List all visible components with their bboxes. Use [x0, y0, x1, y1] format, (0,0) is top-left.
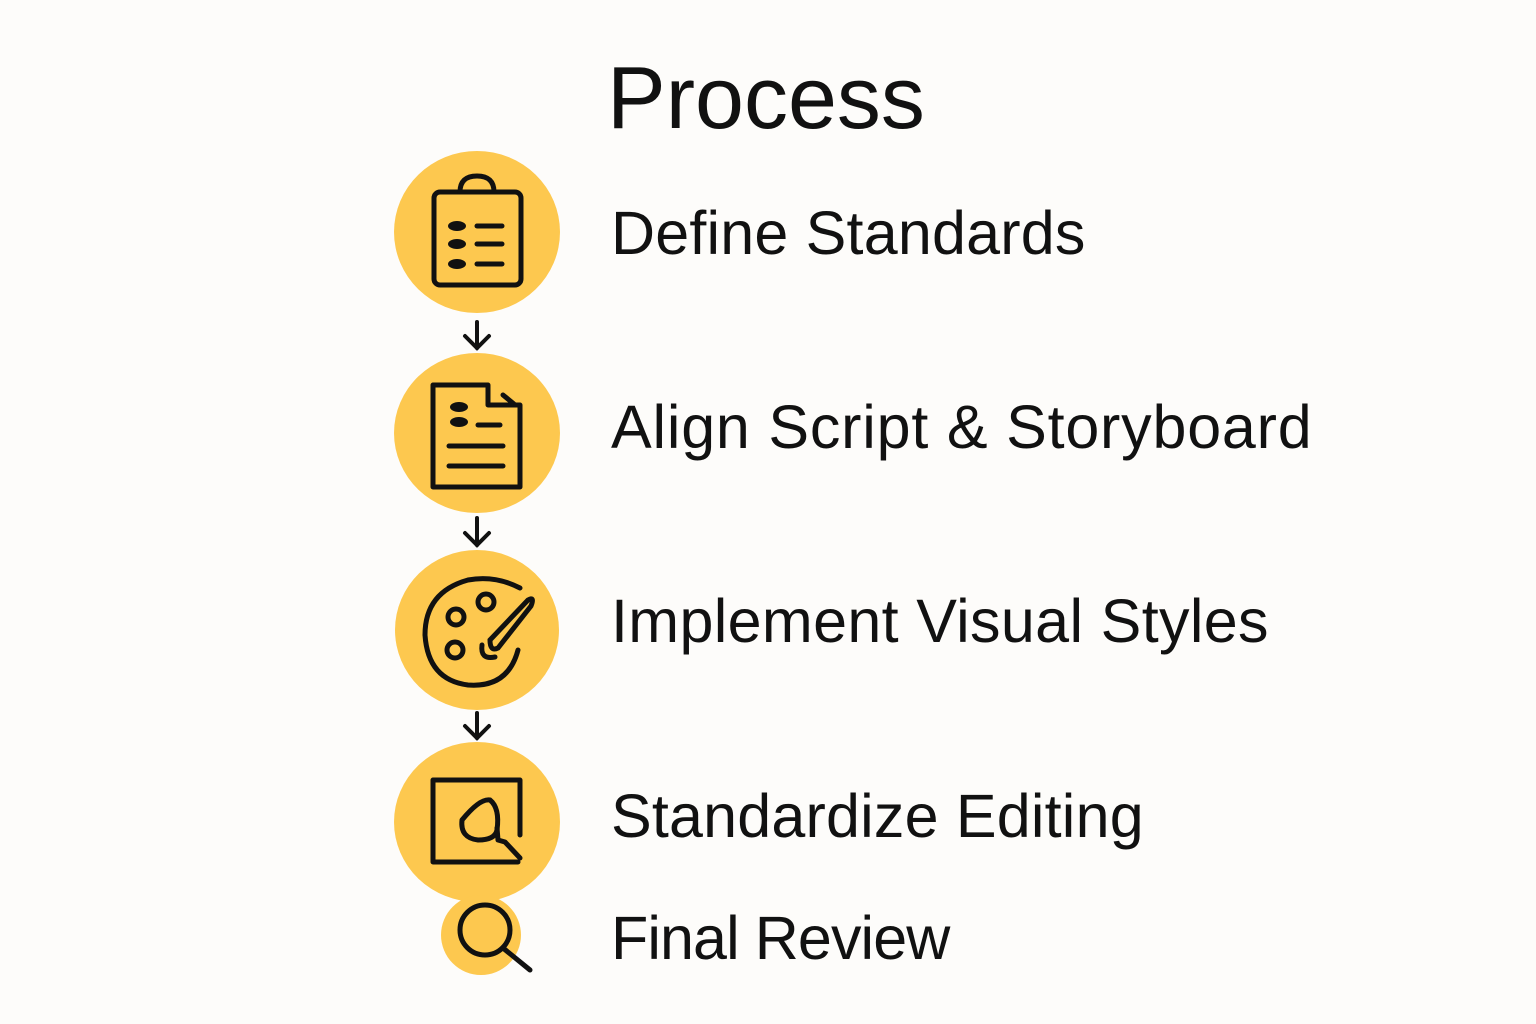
- title: Process: [607, 48, 925, 147]
- icon: script document: [394, 353, 560, 513]
- icon: magnifier: [441, 895, 530, 975]
- label: Final Review: Final Review: [611, 904, 949, 972]
- arrow 1: [465, 322, 489, 348]
- icon: clipboard: [394, 151, 560, 313]
- icon: palette: [395, 550, 559, 710]
- arrow 2: [465, 518, 489, 545]
- icon: editing frame: [394, 742, 560, 902]
- label: Standardize Editing: Standardize Editing: [611, 782, 1144, 850]
- label: Implement Visual Styles: Implement Visual Styles: [611, 587, 1269, 655]
- arrow 3: [465, 713, 489, 738]
- label: Align Script & Storyboard: Align Script & Storyboard: [611, 393, 1312, 461]
- label: Define Standards: Define Standards: [611, 199, 1086, 267]
